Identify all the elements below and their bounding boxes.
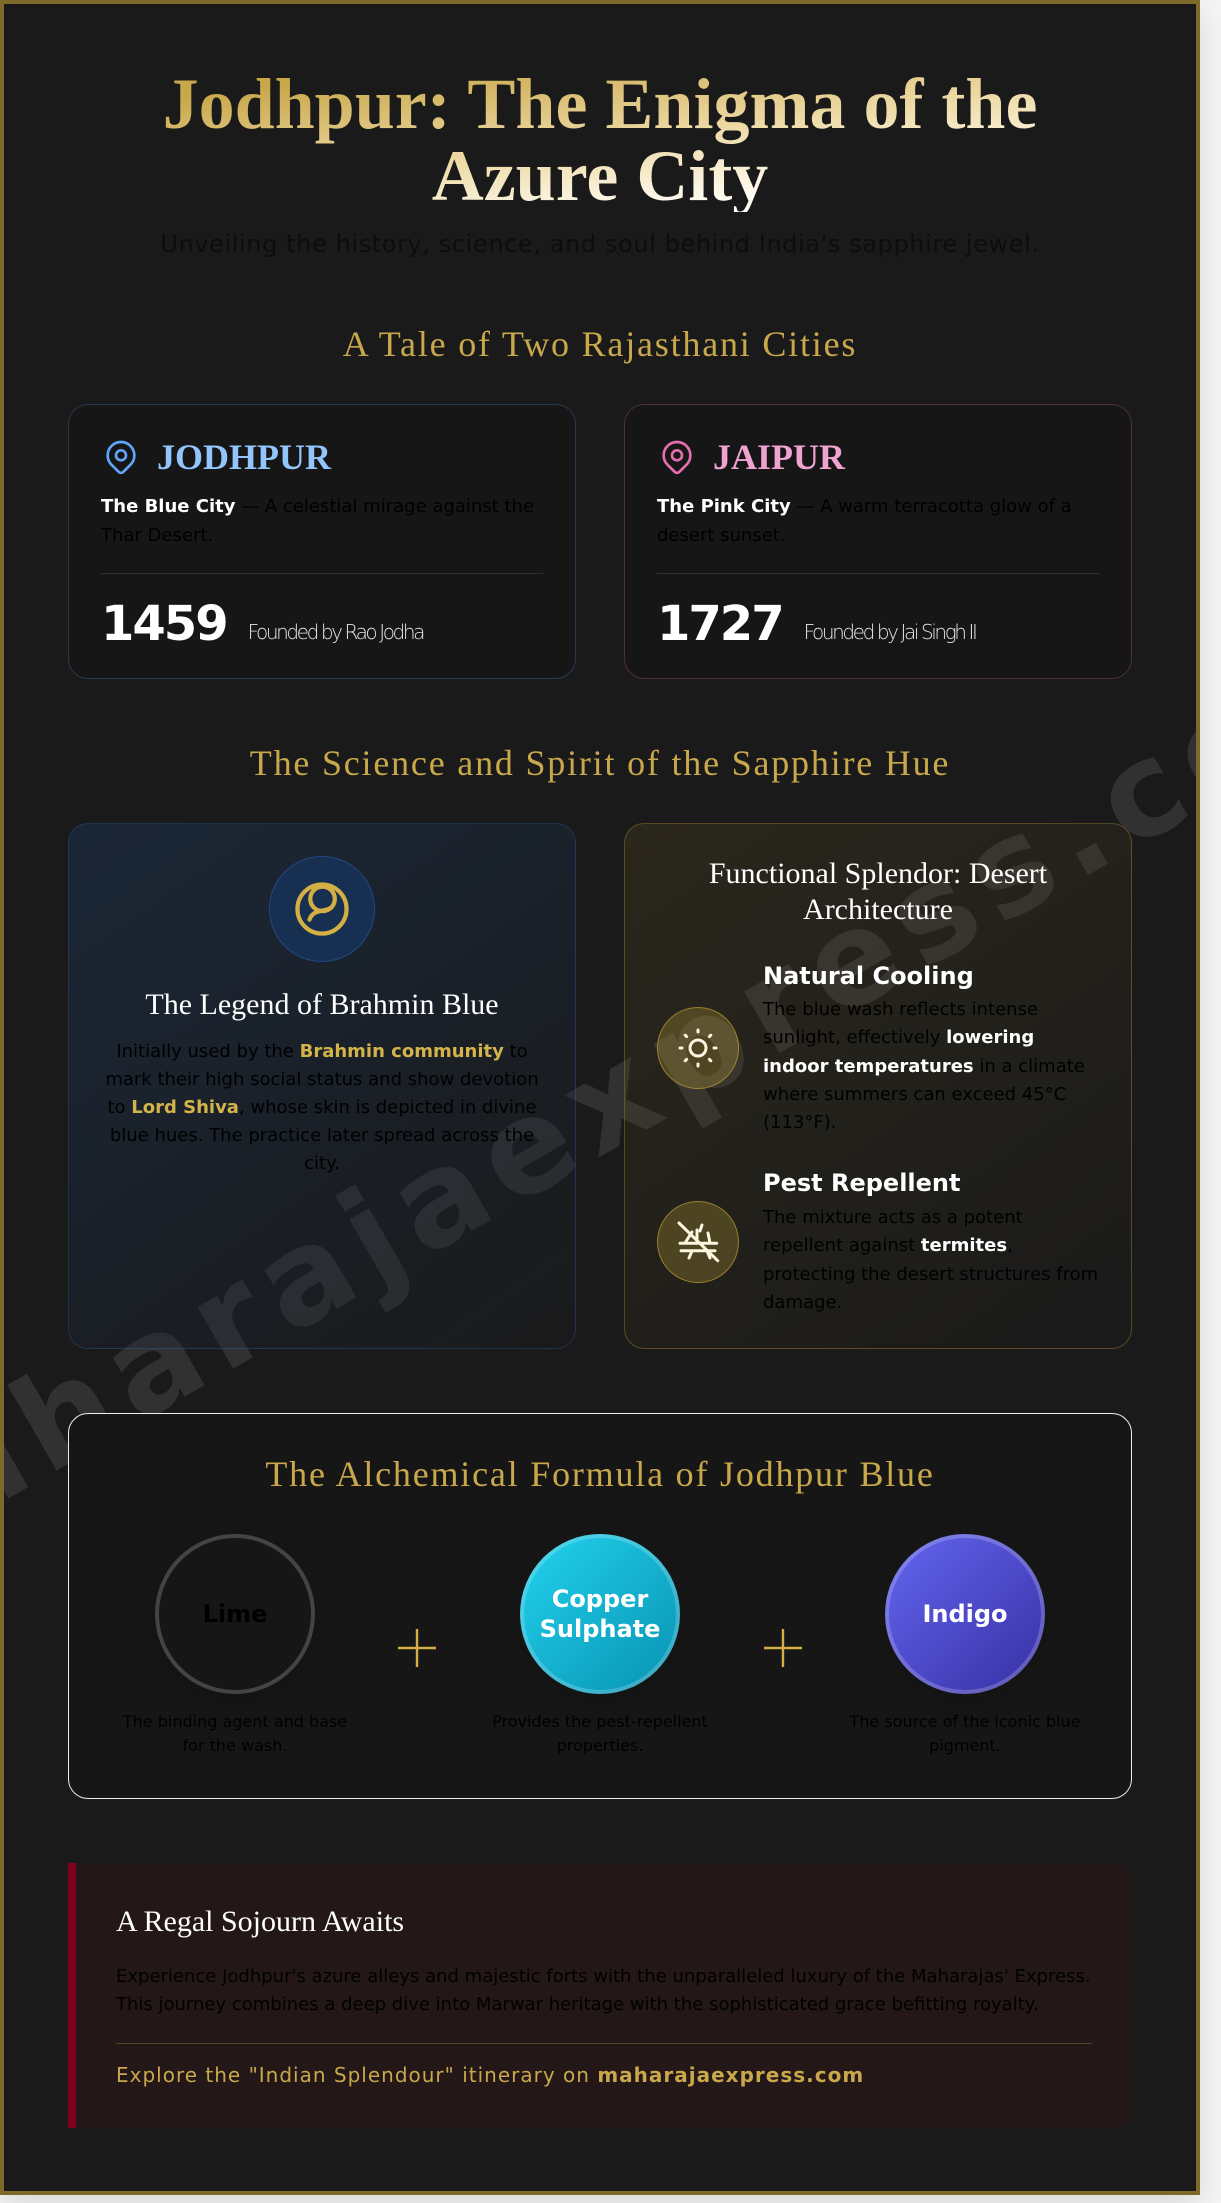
cta text: Experience Jodhpur's azure alleys and majestic forts with the unparalleled luxury of the Maharajas' Express. — [116, 1966, 1091, 1987]
icon: plus — [398, 1629, 436, 1667]
cta link: Explore the "Indian Splendour" itinerary on maharajaexpress.com — [116, 2062, 864, 2086]
founding year: 1459 — [101, 596, 227, 652]
ingredient: lime — [123, 1534, 347, 1755]
panel heading: The Legend of Brahmin Blue — [145, 988, 499, 1021]
heading: tale of two cities: A Tale of Two Rajasthani Cities — [343, 324, 857, 364]
icon: map pin blue — [106, 440, 136, 474]
description: The Pink City — A warm terracotta glow of a — [657, 496, 1072, 517]
icon: map pin pink — [662, 440, 692, 474]
feature text — [763, 999, 1085, 1133]
caption: for the wash. — [183, 1736, 287, 1755]
heading: science and spirit: The Science and Spirit of the Sapphire Hue — [250, 743, 950, 783]
description: Thar Desert. — [101, 525, 213, 546]
feature title: Natural Cooling — [763, 962, 974, 990]
city name: JAIPUR — [713, 437, 845, 477]
body text — [105, 1041, 539, 1174]
circle: copper sulphate: Copper — [552, 1585, 648, 1613]
circle: indigo — [885, 1534, 1045, 1694]
feature text: damage. — [763, 1292, 842, 1313]
body text: mark their high social status and show devotion — [105, 1069, 539, 1090]
caption — [850, 1712, 1080, 1755]
panel: legend of Brahmin blue — [68, 823, 576, 1349]
cta text: This journey combines a deep dive into Marwar heritage with the sophisticated grace befitting royalty. — [116, 1994, 1039, 2015]
feature text: where summers can exceed 45°C — [763, 1084, 1066, 1105]
panel: alchemical formula — [68, 1413, 1132, 1799]
title — [68, 68, 1132, 212]
icon: no termites — [657, 1201, 739, 1283]
city name: JODHPUR — [157, 437, 331, 477]
caption: pigment. — [929, 1736, 1001, 1755]
panel heading: Functional Splendor: Desert — [709, 857, 1047, 890]
description: The Blue City — A celestial mirage against the — [101, 496, 534, 517]
panel heading: The Alchemical Formula of Jodhpur Blue — [265, 1454, 935, 1494]
caption: Provides the pest-repellent — [492, 1712, 708, 1731]
panel: functional splendor — [624, 823, 1132, 1349]
circle: copper sulphate: Sulphate — [540, 1615, 660, 1643]
circle: lime — [155, 1534, 315, 1694]
panel: Jodhpur — [68, 404, 576, 679]
feature text: The mixture acts as a potent — [763, 1207, 1023, 1228]
body text: to Lord Shiva, whose skin is depicted in divine — [107, 1097, 537, 1118]
feature: natural cooling — [657, 962, 1085, 1133]
circle: copper sulphate — [520, 1534, 680, 1694]
panel heading — [709, 857, 1047, 926]
caption — [492, 1712, 708, 1755]
founder: Founded by Rao Jodha — [248, 620, 423, 644]
ingredient: indigo — [850, 1534, 1080, 1755]
caption: The source of the iconic blue — [850, 1712, 1080, 1731]
body text: Initially used by the Brahmin community to — [116, 1041, 528, 1062]
panel heading: Architecture — [803, 893, 953, 926]
ingredient: copper sulphate — [492, 1534, 708, 1755]
feature text: protecting the desert structures from — [763, 1264, 1098, 1284]
feature text: sunlight, effectively lowering — [763, 1027, 1034, 1048]
feature text — [763, 1207, 1098, 1313]
founder: Founded by Jai Singh II — [804, 620, 976, 644]
title: Azure City — [432, 136, 768, 216]
caption: The binding agent and base — [123, 1712, 347, 1731]
panel: Jaipur — [624, 404, 1132, 679]
cta heading: A Regal Sojourn Awaits — [116, 1905, 404, 1938]
icon: plus — [764, 1629, 802, 1667]
icon: sun — [657, 1007, 739, 1089]
cta text — [116, 1966, 1091, 2015]
caption: properties. — [557, 1736, 643, 1755]
description: desert sunset. — [657, 525, 786, 546]
title: Jodhpur: The Enigma of the — [163, 64, 1037, 144]
body text: city. — [304, 1153, 340, 1174]
feature text: The blue wash reflects intense — [763, 999, 1038, 1020]
description — [657, 496, 1072, 546]
feature text: repellent against termites, — [763, 1235, 1013, 1256]
icon: om circle — [269, 856, 375, 962]
description — [101, 496, 534, 546]
subtitle: Unveiling the history, science, and soul behind India's sapphire jewel. — [160, 230, 1040, 258]
founding year: 1727 — [657, 596, 783, 652]
circle: indigo: Indigo — [922, 1600, 1008, 1628]
caption — [123, 1712, 347, 1755]
body text: blue hues. The practice later spread across the — [110, 1125, 534, 1146]
feature text: indoor temperatures in a climate — [763, 1056, 1085, 1076]
feature title: Pest Repellent — [763, 1169, 960, 1197]
panel: call to action — [68, 1863, 1132, 2128]
circle: lime: Lime — [203, 1600, 267, 1628]
feature: pest repellent — [657, 1169, 1098, 1313]
feature text: (113°F). — [763, 1112, 836, 1133]
